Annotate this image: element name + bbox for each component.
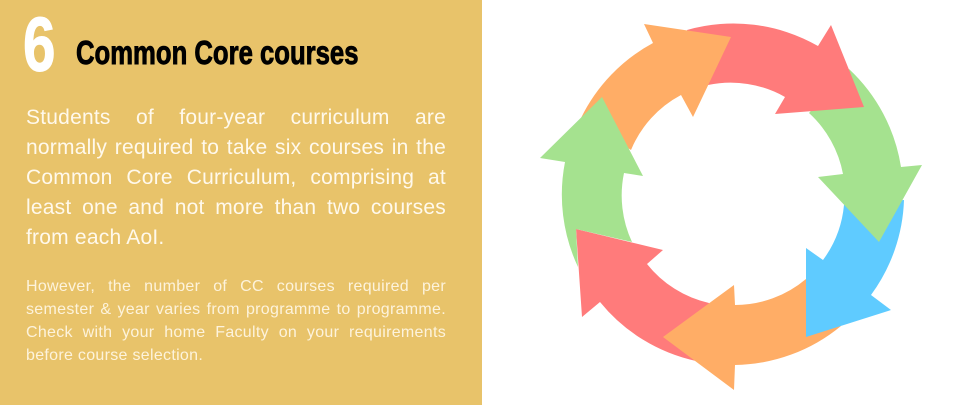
- text block: main requirement: Common Core Curriculum, comprising at: [26, 166, 446, 189]
- arrow: orange bottom: [663, 279, 841, 390]
- text block: programme variation note: Check with your home Faculty on your requirements: [26, 324, 446, 341]
- arrow: orange upper left: [581, 24, 731, 150]
- text block: programme variation note: semester & year varies from programme to programme.: [26, 301, 446, 318]
- text block: main requirement: [26, 106, 446, 249]
- arrow: red lower left: [576, 229, 709, 361]
- text block: main requirement: least one and not more than two courses: [26, 196, 446, 219]
- text block: main requirement: from each AoI.: [26, 226, 164, 249]
- arrow: blue right: [806, 200, 904, 337]
- arrow: green right: [809, 69, 922, 242]
- heading: Common Core courses: [76, 34, 358, 71]
- text block: main requirement: normally required to take six courses in the: [26, 136, 446, 159]
- text block: main requirement: Students of four-year curriculum are: [26, 106, 446, 129]
- text block: programme variation note: before course selection.: [26, 347, 203, 364]
- panel: text background: [0, 0, 482, 405]
- step number: 6: [23, 2, 56, 88]
- arrow: green upper left: [540, 97, 643, 267]
- arrow: red top: [687, 24, 864, 114]
- text block: programme variation note: [26, 278, 446, 364]
- text block: programme variation note: However, the number of CC courses required per: [26, 278, 446, 295]
